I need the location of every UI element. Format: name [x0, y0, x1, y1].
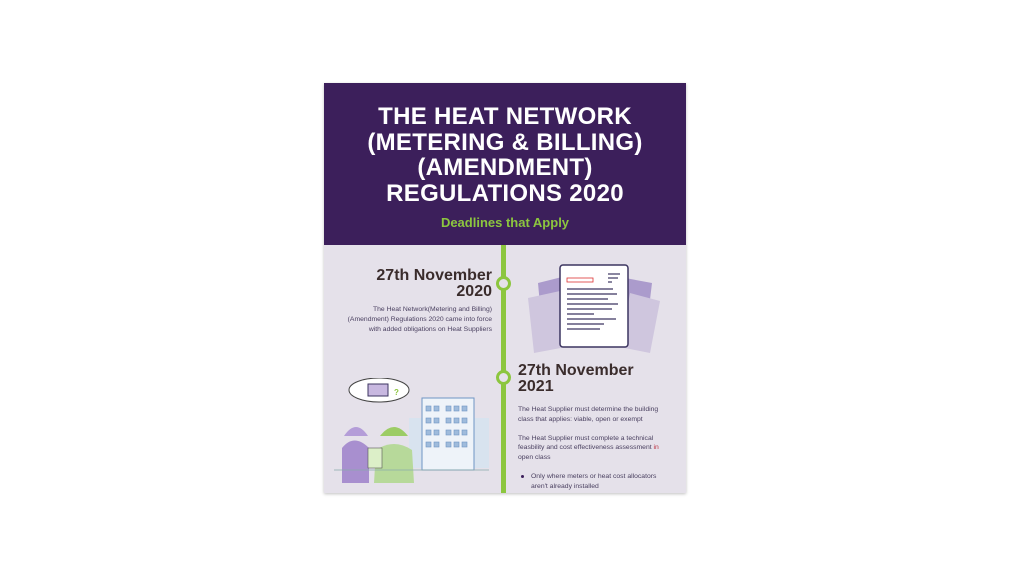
date 2021: 27th November [518, 362, 634, 379]
text 2020: (Amendment) Regulations 2020 came into force [348, 316, 492, 323]
date 2020 [376, 267, 492, 300]
text 2021: The Heat Supplier must complete a technical [518, 434, 653, 442]
text 2021 [518, 406, 659, 490]
bullet: aren't already installed [531, 482, 599, 490]
icon: document [528, 264, 660, 353]
title: REGULATIONS 2020 [386, 180, 624, 206]
text 2021: The Heat Supplier must determine the building [518, 406, 658, 413]
text 2020 [348, 306, 492, 333]
date 2021: 2021 [518, 378, 554, 395]
text 2021: open class [518, 454, 550, 460]
title: THE HEAT NETWORK [378, 103, 632, 130]
date 2020: 2020 [456, 283, 492, 300]
title [367, 103, 643, 206]
bullet: Only where meters or heat cost allocators [531, 473, 656, 480]
text 2021: feasbility and cost effectiveness assessment in [518, 444, 659, 451]
header panel [324, 83, 686, 245]
title: (METERING & BILLING) [367, 128, 643, 156]
timeline node 1 [496, 276, 511, 291]
illustration: workers and building: ? [394, 388, 399, 397]
timeline line [501, 245, 506, 493]
illustration: workers and building [334, 378, 489, 483]
date 2020: 27th November [376, 267, 492, 284]
title: (AMENDMENT) [417, 154, 593, 181]
infographic card [324, 83, 686, 493]
text 2020: with added obligations on Heat Suppliers [369, 326, 492, 333]
subtitle: Deadlines that Apply [441, 215, 569, 230]
text 2020: The Heat Network(Metering and Billing) [373, 306, 492, 313]
text 2021: class that applies: viable, open or exempt [518, 416, 643, 422]
bullet [521, 473, 656, 490]
date 2021 [518, 362, 634, 395]
timeline node 2 [496, 370, 511, 385]
